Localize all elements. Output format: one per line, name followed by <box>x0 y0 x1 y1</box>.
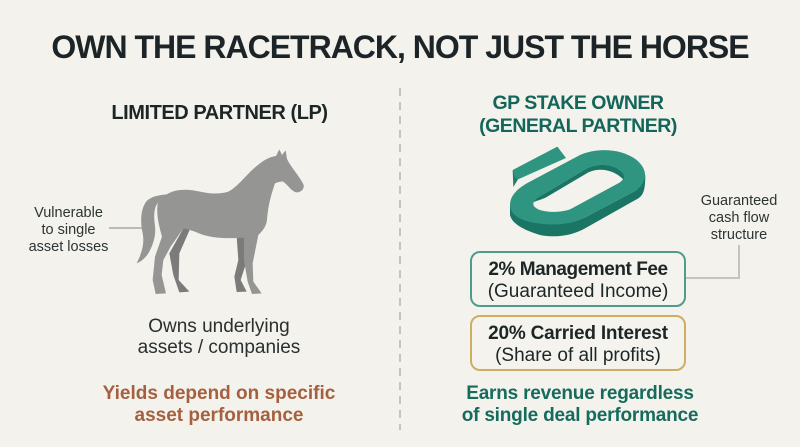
text: yields <box>103 383 335 426</box>
callout: guaranteed cash flow: cash flow <box>709 210 769 226</box>
box: carried interest <box>470 315 686 371</box>
text: earns revenue: Earns revenue regardless <box>466 383 694 404</box>
text: owns underlying assets: Owns underlying <box>148 316 290 337</box>
text: owns underlying assets: assets / companies <box>138 337 300 358</box>
callout: vulnerable: Vulnerable <box>34 205 103 221</box>
text: carried interest: (Share of all profits) <box>495 345 661 366</box>
icon: horse <box>137 149 304 294</box>
text: earns revenue <box>462 383 698 426</box>
heading: GP stake owner: (GENERAL PARTNER) <box>479 115 677 137</box>
callout: guaranteed cash flow: Guaranteed <box>701 193 777 209</box>
title: OWN THE RACETRACK, NOT JUST THE HORSE <box>51 29 749 65</box>
text: carried interest: 20% Carried Interest <box>488 323 668 344</box>
callout: guaranteed cash flow <box>701 193 777 243</box>
text: yields: asset performance <box>135 405 303 426</box>
text: management fee <box>488 259 668 302</box>
connector: guaranteed cash flow <box>686 245 739 278</box>
callout: vulnerable: to single <box>41 222 96 238</box>
text: owns underlying assets <box>138 316 300 358</box>
text: earns revenue: of single deal performance <box>462 405 698 426</box>
text: management fee: 2% Management Fee <box>488 259 668 280</box>
heading: GP stake owner <box>479 92 677 137</box>
callout: vulnerable: asset losses <box>29 239 108 255</box>
heading: GP stake owner: GP STAKE OWNER <box>492 92 664 114</box>
box: management fee <box>470 251 686 307</box>
leader line: horse callout <box>109 227 143 229</box>
callout: guaranteed cash flow: structure <box>711 227 767 243</box>
text: carried interest <box>488 323 668 366</box>
text: yields: Yields depend on specific <box>103 383 335 404</box>
text: management fee: (Guaranteed Income) <box>488 281 668 302</box>
callout: vulnerable <box>29 205 108 255</box>
icon: racetrack <box>510 147 645 236</box>
heading: limited partner: LIMITED PARTNER (LP) <box>111 102 328 124</box>
